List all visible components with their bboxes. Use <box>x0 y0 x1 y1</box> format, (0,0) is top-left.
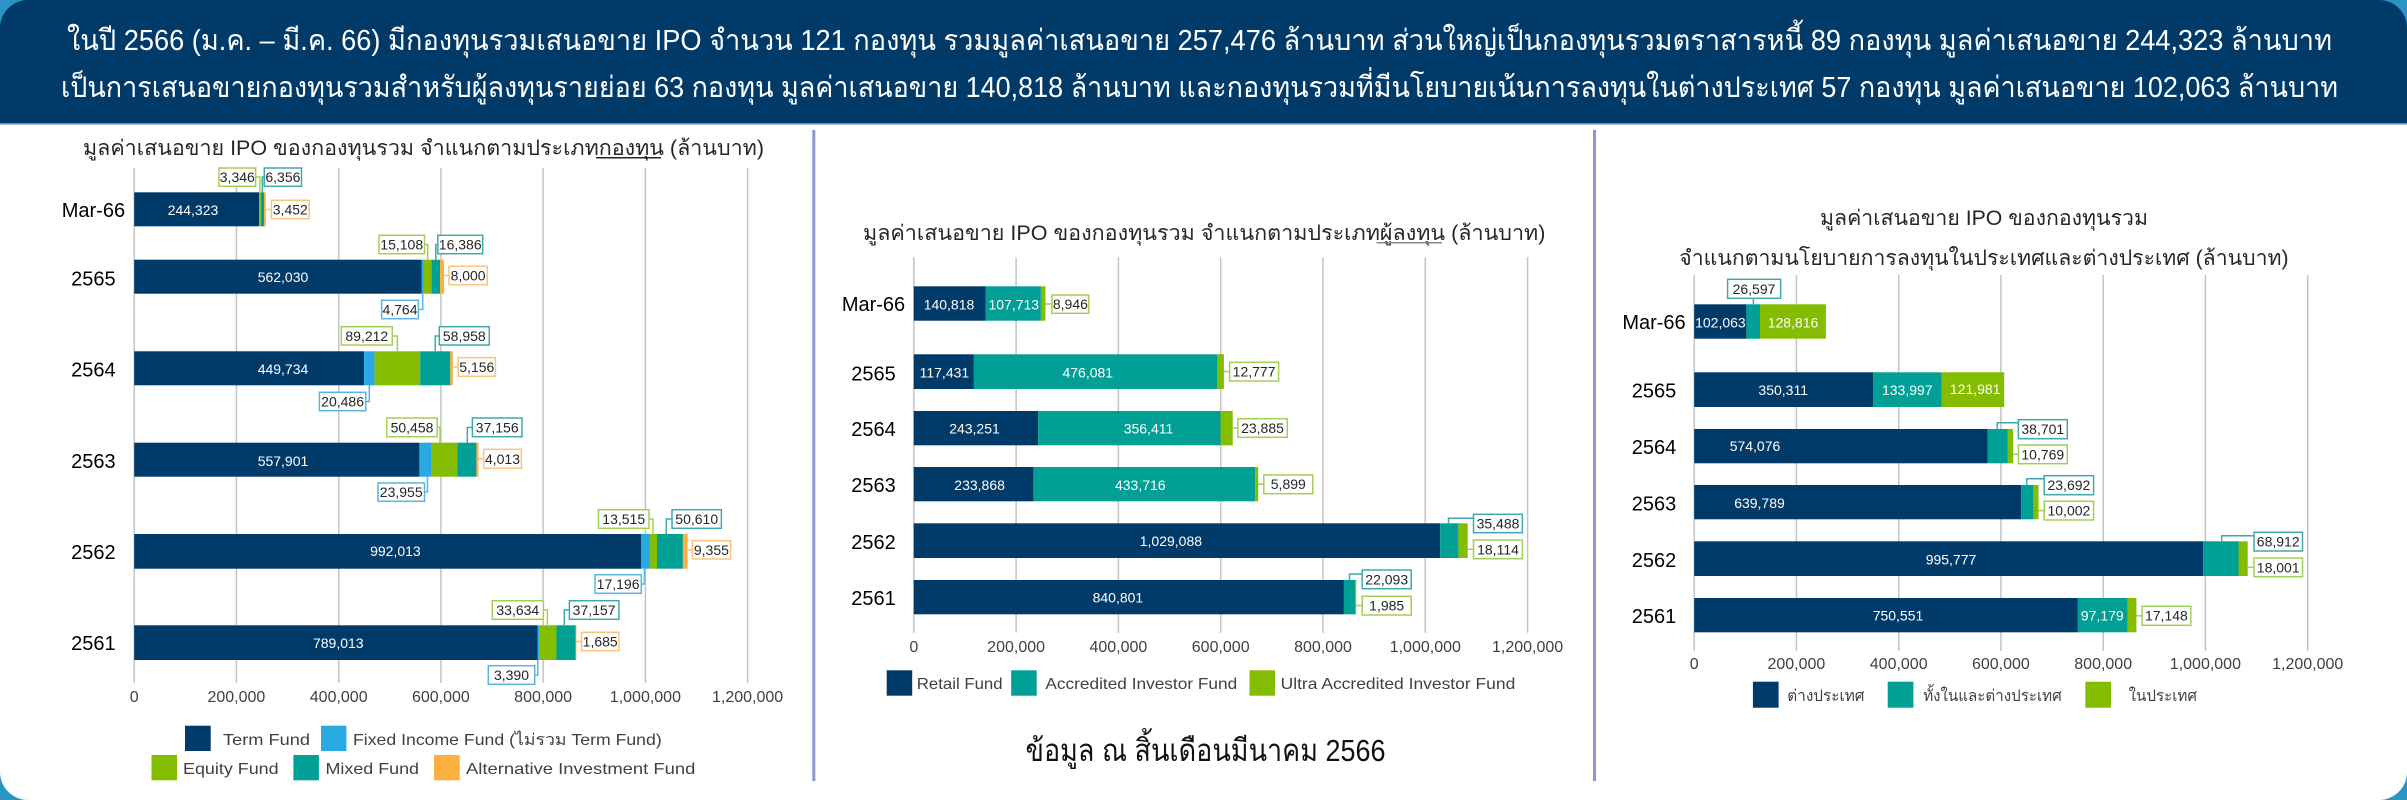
bar row: 2561: 97,179 <box>2081 607 2124 623</box>
bar row: 2564: 356,411 <box>1124 420 1173 436</box>
callout: Mar-66 alternative: 3,452 <box>273 202 308 218</box>
bar row: 2563: 233,868 <box>954 477 1005 493</box>
bar row: 2562 <box>134 534 688 569</box>
callout: 2562 ultra accredited: 18,114 <box>1477 541 1519 557</box>
callout: 2563 fixed income <box>378 477 428 501</box>
callout: 2563 alternative <box>478 449 521 468</box>
callout: Mar-66 equity <box>219 168 260 192</box>
chart 3 title: จำแนกตามนโยบายการลงทุนในประเทศและต่างประเทศ (ล้านบาท) <box>1679 246 2289 271</box>
chart 1 category labels <box>62 200 125 655</box>
chart 1 category labels: 2561 <box>71 633 116 655</box>
callout: 2563 alternative: 4,013 <box>485 451 520 467</box>
bar row: 2562 <box>1694 541 2248 576</box>
callout: 2564 fixed income: 20,486 <box>321 394 364 410</box>
chart 3 category labels <box>1622 312 1686 628</box>
callout: 2562 mixed <box>666 510 721 534</box>
chart 2 category labels <box>842 294 905 610</box>
callout: Mar-66 both <box>1728 279 1781 304</box>
callout: 2561 accredited <box>1350 570 1411 589</box>
bar row: 2565 <box>914 354 1224 389</box>
bar row: 2565: 350,311 <box>1758 382 1808 398</box>
callout: 2562 both: 68,912 <box>2257 534 2300 550</box>
bar row: 2563: 639,789 <box>1734 495 1785 511</box>
bar row: 2561 <box>1694 598 2136 632</box>
chart 3 x axis labels: 400,000 <box>1870 656 1928 673</box>
callout: 2562 domestic: 18,001 <box>2257 559 2300 575</box>
callout: 2561 fixed income: 3,390 <box>494 667 529 683</box>
chart 1 title: มูลค่าเสนอขาย IPO ของกองทุนรวม จำแนกตามประเภทกองทุน (ล้านบาท) <box>83 137 764 161</box>
callout: 2562 alternative: 9,355 <box>694 542 729 558</box>
chart 1 x axis labels: 400,000 <box>310 689 368 706</box>
chart 2 category labels: Mar-66 <box>842 294 905 316</box>
chart 1 legend: Fixed Income Fund (ไม่รวม Term Fund) <box>353 730 662 749</box>
chart 1 legend: Alternative Investment Fund <box>466 761 695 778</box>
chart 1 x axis labels: 600,000 <box>412 689 470 706</box>
callout: 2563 equity: 50,458 <box>391 420 434 436</box>
callout: 2562 accredited <box>1448 514 1522 533</box>
callout: 2561 ultra accredited: 1,985 <box>1369 598 1404 614</box>
callout: 2562 equity: 13,515 <box>602 511 645 527</box>
panel: chart by investor type <box>842 222 1563 769</box>
bar row: Mar-66: 107,713 <box>988 296 1039 312</box>
chart 2 x axis labels: 1,200,000 <box>1492 639 1563 656</box>
callout: 2563 mixed <box>467 418 522 443</box>
callout: 2561 equity: 33,634 <box>496 602 539 618</box>
chart 2 x axis labels: 600,000 <box>1192 639 1250 656</box>
bar row: 2563: 433,716 <box>1115 477 1166 493</box>
chart 1 legend: Term Fund <box>223 732 310 749</box>
callout: 2564 equity <box>341 327 397 351</box>
bar row: Mar-66: 140,818 <box>924 296 975 312</box>
chart 1 legend: Equity Fund <box>183 761 279 778</box>
chart 1 x axis labels: 1,200,000 <box>712 689 783 706</box>
chart 2 category labels: 2563 <box>851 475 896 497</box>
bar row: 2564 <box>914 411 1233 445</box>
chart 1 category labels: 2562 <box>71 542 116 564</box>
callout: 2563 mixed: 37,156 <box>476 420 519 436</box>
chart 1 category labels: Mar-66 <box>62 200 125 222</box>
chart 1 category labels: 2564 <box>71 360 116 382</box>
chart 1 legend: Mixed Fund <box>326 761 419 778</box>
chart 3 x axis labels: 800,000 <box>2074 656 2132 673</box>
callout: 2563 ultra accredited <box>1258 475 1313 494</box>
callout: 2563 domestic: 10,002 <box>2047 503 2091 519</box>
chart 3 category labels: 2564 <box>1632 437 1676 459</box>
callout: 2565 mixed <box>436 235 483 260</box>
bar row: 2561 <box>914 580 1356 614</box>
bar row: Mar-66: 102,063 <box>1695 314 1746 330</box>
chart 2 x axis labels <box>909 639 1563 656</box>
callout: 2561 accredited: 22,093 <box>1365 571 1408 587</box>
callout: 2565 equity <box>379 235 428 260</box>
bar row: 2564 <box>134 351 453 385</box>
bar row: 2564: 243,251 <box>949 420 1000 436</box>
callout: 2563 ultra accredited: 5,899 <box>1271 476 1306 492</box>
chart 3 category labels: 2563 <box>1632 494 1676 516</box>
callout: 2563 equity <box>387 418 440 443</box>
bar row: 2563 <box>914 467 1258 501</box>
callout: 2564 alternative: 5,156 <box>459 359 495 375</box>
callout: 2561 mixed: 37,157 <box>573 602 616 618</box>
bar row: 2563: 557,901 <box>258 453 309 469</box>
chart 1 legend <box>152 726 695 780</box>
callout: 2562 fixed income <box>595 569 644 593</box>
chart 2 category labels: 2561 <box>851 588 896 610</box>
chart 2 category labels: 2562 <box>851 532 896 554</box>
bar row: 2565: 476,081 <box>1062 364 1113 380</box>
chart 3 category labels: Mar-66 <box>1622 312 1686 334</box>
callout: 2565 fixed income <box>382 294 423 319</box>
bar row: Mar-66: 128,816 <box>1768 314 1819 330</box>
bar row: 2565 <box>1694 372 2004 407</box>
chart 3 x axis labels <box>1690 656 2343 673</box>
panel: chart by investment policy <box>1622 207 2343 708</box>
bar row: 2562: 992,013 <box>370 543 421 559</box>
callout: 2561 fixed income <box>488 660 538 684</box>
callout: 2561 domestic: 17,148 <box>2145 608 2188 624</box>
chart 3 x axis labels: 1,000,000 <box>2170 656 2241 673</box>
chart 2 x axis labels: 1,000,000 <box>1390 639 1461 656</box>
callout: 2561 equity <box>492 601 547 625</box>
bar row: 2562: 1,029,088 <box>1140 533 1202 549</box>
callout: 2565 alternative: 8,000 <box>451 268 486 284</box>
callout: 2562 equity <box>598 510 653 534</box>
chart 2 x axis labels: 200,000 <box>987 639 1045 656</box>
bar row: 2565: 121,981 <box>1950 381 2001 397</box>
bar row: 2561: 750,551 <box>1873 607 1924 623</box>
chart 2 x axis labels: 800,000 <box>1294 639 1352 656</box>
callout: 2564 domestic <box>2013 445 2067 464</box>
chart 1 x axis labels: 200,000 <box>207 689 265 706</box>
bar row: 2564 <box>1694 429 2013 463</box>
callout: 2565 ultra accredited <box>1224 362 1279 381</box>
chart 1 category labels: 2563 <box>71 451 116 473</box>
callout: Mar-66 mixed <box>262 168 302 192</box>
callout: 2565 fixed income: 4,764 <box>382 302 418 318</box>
callout: 2564 equity: 89,212 <box>345 328 388 344</box>
bar row: 2561: 840,801 <box>1093 589 1143 605</box>
callout: 2565 mixed: 16,386 <box>439 236 482 252</box>
chart 3 x axis labels: 600,000 <box>1972 656 2030 673</box>
chart 3 legend: ต่างประเทศ <box>1787 688 1864 705</box>
chart 2 category labels: 2564 <box>851 419 896 441</box>
callout: Mar-66 mixed: 6,356 <box>265 169 301 185</box>
callout: Mar-66 both: 26,597 <box>1733 281 1776 297</box>
bar row: Mar-66 <box>134 192 266 226</box>
callout: 2564 both: 38,701 <box>2021 421 2064 437</box>
chart 3 x axis labels: 0 <box>1690 656 1699 673</box>
data date note: ข้อมูล ณ สิ้นเดือนมีนาคม 2566 <box>1026 728 1386 769</box>
callout: 2564 mixed: 58,958 <box>443 328 486 344</box>
bar row: 2563 <box>1694 485 2038 519</box>
chart 3 category labels: 2565 <box>1632 380 1676 402</box>
bar row: 2564: 449,734 <box>258 361 309 377</box>
chart 3 category labels: 2561 <box>1632 606 1676 628</box>
callout: 2561 domestic <box>2136 606 2191 625</box>
callout: 2563 both <box>2027 476 2094 495</box>
chart 3 x axis labels: 1,200,000 <box>2272 656 2343 673</box>
chart 2 legend: Retail Fund <box>917 676 1003 693</box>
callout: 2564 mixed <box>435 327 489 351</box>
bar row: 2561 <box>134 625 576 660</box>
callout: 2563 domestic <box>2038 501 2094 520</box>
callout: 2564 ultra accredited: 23,885 <box>1241 420 1284 436</box>
chart 3 title: มูลค่าเสนอขาย IPO ของกองทุนรวม <box>1820 207 2148 231</box>
callout: 2563 both: 23,692 <box>2047 477 2091 493</box>
bar row: 2563 <box>134 443 478 477</box>
callout: Mar-66 equity: 3,346 <box>220 169 255 185</box>
chart 3 legend <box>1753 682 2197 708</box>
callout: 2565 equity: 15,108 <box>380 236 423 252</box>
callout: 2562 domestic <box>2248 558 2302 577</box>
callout: 2564 fixed income <box>319 385 369 411</box>
callout: 2562 both <box>2222 532 2302 551</box>
chart 1 category labels: 2565 <box>71 268 116 290</box>
chart 1 x axis labels: 0 <box>130 689 139 706</box>
callout: 2561 ultra accredited <box>1356 596 1411 615</box>
bar row: 2562 <box>914 523 1468 558</box>
bar row: 2565: 133,997 <box>1882 382 1933 398</box>
callout: 2561 mixed <box>564 601 619 625</box>
callout: 2562 ultra accredited <box>1468 540 1522 559</box>
bar row: Mar-66 <box>1694 304 1826 339</box>
callout: Mar-66 ultra accredited: 8,946 <box>1053 296 1088 312</box>
callout: 2564 ultra accredited <box>1233 419 1287 437</box>
bar row: Mar-66: 244,323 <box>168 202 219 218</box>
chart 2 title: มูลค่าเสนอขาย IPO ของกองทุนรวม จำแนกตามประเภทผู้ลงทุน (ล้านบาท) <box>863 222 1545 246</box>
bar row: 2564: 574,076 <box>1730 438 1781 454</box>
callout: 2562 mixed: 50,610 <box>675 511 718 527</box>
chart 2 legend <box>887 670 1515 696</box>
chart 1 x axis labels: 800,000 <box>514 689 572 706</box>
chart 2 legend: Accredited Investor Fund <box>1045 676 1237 693</box>
bar row: 2565 <box>134 260 444 294</box>
bar row: 2565: 117,431 <box>920 364 969 380</box>
bar row: 2562: 995,777 <box>1926 551 1977 567</box>
chart 3 legend: ทั้งในและต่างประเทศ <box>1923 684 2062 705</box>
bar row: 2565: 562,030 <box>258 269 309 285</box>
chart 2 category labels: 2565 <box>851 364 896 386</box>
chart 2 x axis labels: 0 <box>909 639 918 656</box>
callout: 2564 domestic: 10,769 <box>2021 446 2064 462</box>
chart 1 x axis labels <box>130 689 783 706</box>
chart 3 legend: ในประเทศ <box>2129 686 2197 705</box>
header banner <box>0 0 2407 124</box>
panel: chart by fund type <box>62 137 783 780</box>
chart 3 category labels: 2562 <box>1632 550 1676 572</box>
callout: 2562 accredited: 35,488 <box>1477 516 1520 532</box>
callout: 2561 alternative: 1,685 <box>583 634 618 650</box>
chart 2 legend: Ultra Accredited Investor Fund <box>1281 676 1515 693</box>
chart 3 title <box>1679 207 2289 271</box>
chart 1 x axis labels: 1,000,000 <box>610 689 681 706</box>
bar row: 2561: 789,013 <box>313 635 364 651</box>
callout: 2565 ultra accredited: 12,777 <box>1233 364 1276 380</box>
chart 3 x axis labels: 200,000 <box>1767 656 1825 673</box>
chart 2 x axis labels: 400,000 <box>1089 639 1147 656</box>
bar row: Mar-66 <box>914 286 1046 321</box>
callout: 2562 fixed income: 17,196 <box>597 576 640 592</box>
callout: 2563 fixed income: 23,955 <box>380 484 423 500</box>
callout: 2564 both <box>1997 420 2067 439</box>
